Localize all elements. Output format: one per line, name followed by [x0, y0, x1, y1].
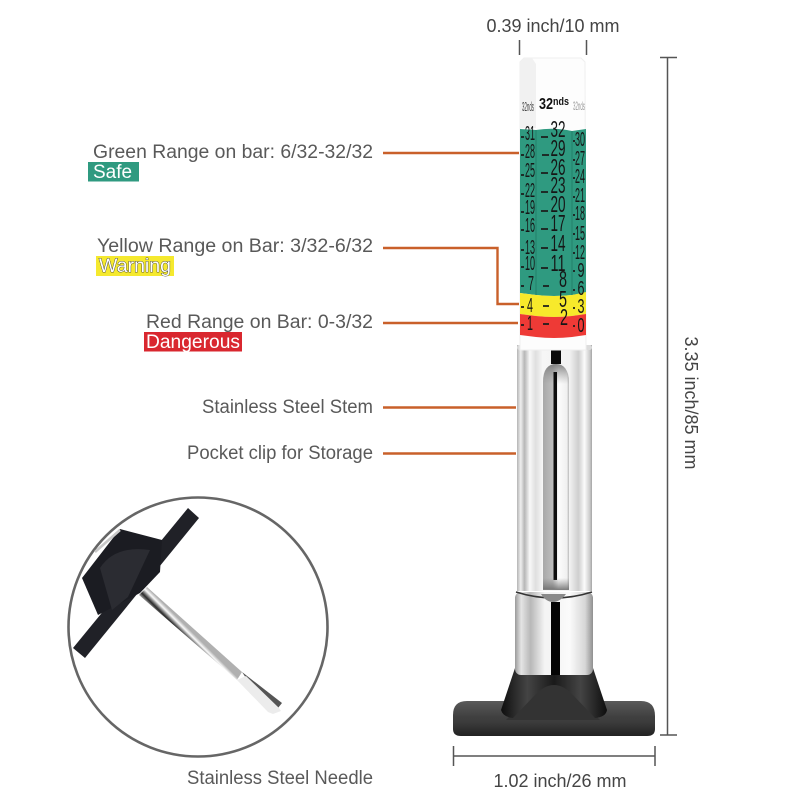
graduated bar: 10	[525, 252, 535, 275]
centre scale: 23	[550, 172, 566, 198]
t-shaped base	[453, 668, 655, 736]
bar heading: 32	[539, 96, 556, 113]
bar heading: 32nds	[522, 99, 534, 114]
graduated bar: 19	[525, 196, 535, 219]
centre scale: 5	[559, 286, 567, 312]
label: red range	[144, 312, 373, 353]
tag: warning: Warning	[99, 256, 171, 277]
stem body	[517, 345, 592, 591]
centre scale: 14	[550, 230, 566, 256]
graduated bar: 31	[525, 122, 535, 145]
label: red range: Red Range on Bar: 0-3/32	[146, 312, 373, 333]
white top of bar	[520, 58, 586, 350]
graduated bar: 16	[525, 214, 535, 237]
graduated bar	[520, 58, 586, 350]
centre scale: 11	[550, 250, 566, 276]
infographic canvas: 12	[575, 241, 585, 264]
foot plate	[73, 508, 199, 658]
centre scale: 2	[560, 304, 568, 330]
left scale: 1	[527, 312, 533, 335]
graduated bar: 28	[525, 140, 535, 163]
centre scale	[541, 116, 568, 330]
yellow zone	[520, 292, 586, 317]
centre scale: 8	[559, 266, 567, 292]
infographic canvas: 24	[575, 165, 585, 188]
infographic canvas: 30	[575, 128, 585, 151]
centre scale: 32	[550, 116, 566, 142]
detail circle: needle	[68, 498, 328, 756]
collar	[515, 592, 593, 675]
centre scale: 26	[550, 154, 566, 180]
red zone	[520, 314, 586, 338]
right scale: 3	[578, 295, 584, 318]
dimension: height: 3.35 inch/85 mm	[681, 336, 701, 470]
needle shaft	[139, 587, 282, 714]
dimension: base width	[454, 746, 655, 791]
graduated bar: 25	[525, 159, 535, 182]
graduated bar: 13	[525, 236, 535, 259]
green zone	[520, 129, 586, 296]
left scale: 7	[528, 272, 534, 295]
bar heading	[522, 96, 585, 114]
label: yellow range: Yellow Range on Bar: 3/32-6/32	[97, 236, 373, 257]
dimension: top width	[486, 16, 620, 55]
right scale: 0	[578, 314, 584, 337]
left scale: 4	[527, 294, 533, 317]
dimension: top width: 0.39 inch/10 mm	[486, 16, 620, 36]
tag: safe: Safe	[93, 162, 132, 183]
infographic canvas: 32nds	[573, 99, 585, 113]
pocket clip	[543, 350, 569, 590]
centre scale: 20	[550, 191, 566, 217]
label: green range	[88, 142, 373, 183]
bar heading: nds	[553, 96, 569, 108]
label: yellow range	[96, 236, 373, 277]
left scale	[521, 122, 535, 335]
label: pocket clip: Pocket clip for Storage	[187, 443, 373, 464]
right scale	[573, 128, 585, 337]
label: green range: Green Range on bar: 6/32-32/32	[93, 142, 373, 163]
infographic canvas: 18	[575, 202, 585, 225]
right scale: 9	[578, 259, 584, 282]
infographic canvas: 21	[575, 184, 585, 207]
label: stainless steel needle: Stainless Steel Needle	[187, 768, 373, 789]
infographic canvas: 27	[575, 147, 585, 170]
tag: dangerous: Dangerous	[146, 332, 240, 353]
right scale: 6	[578, 277, 584, 300]
centre scale: 29	[550, 135, 566, 161]
centre scale: 17	[550, 210, 566, 236]
infographic canvas: 15	[575, 222, 585, 245]
label: stainless steel stem: Stainless Steel Stem	[202, 397, 373, 418]
dimension: base width: 1.02 inch/26 mm	[493, 771, 627, 791]
dimension: height	[660, 58, 701, 735]
graduated bar: 22	[525, 179, 535, 202]
leader lines	[383, 153, 519, 454]
